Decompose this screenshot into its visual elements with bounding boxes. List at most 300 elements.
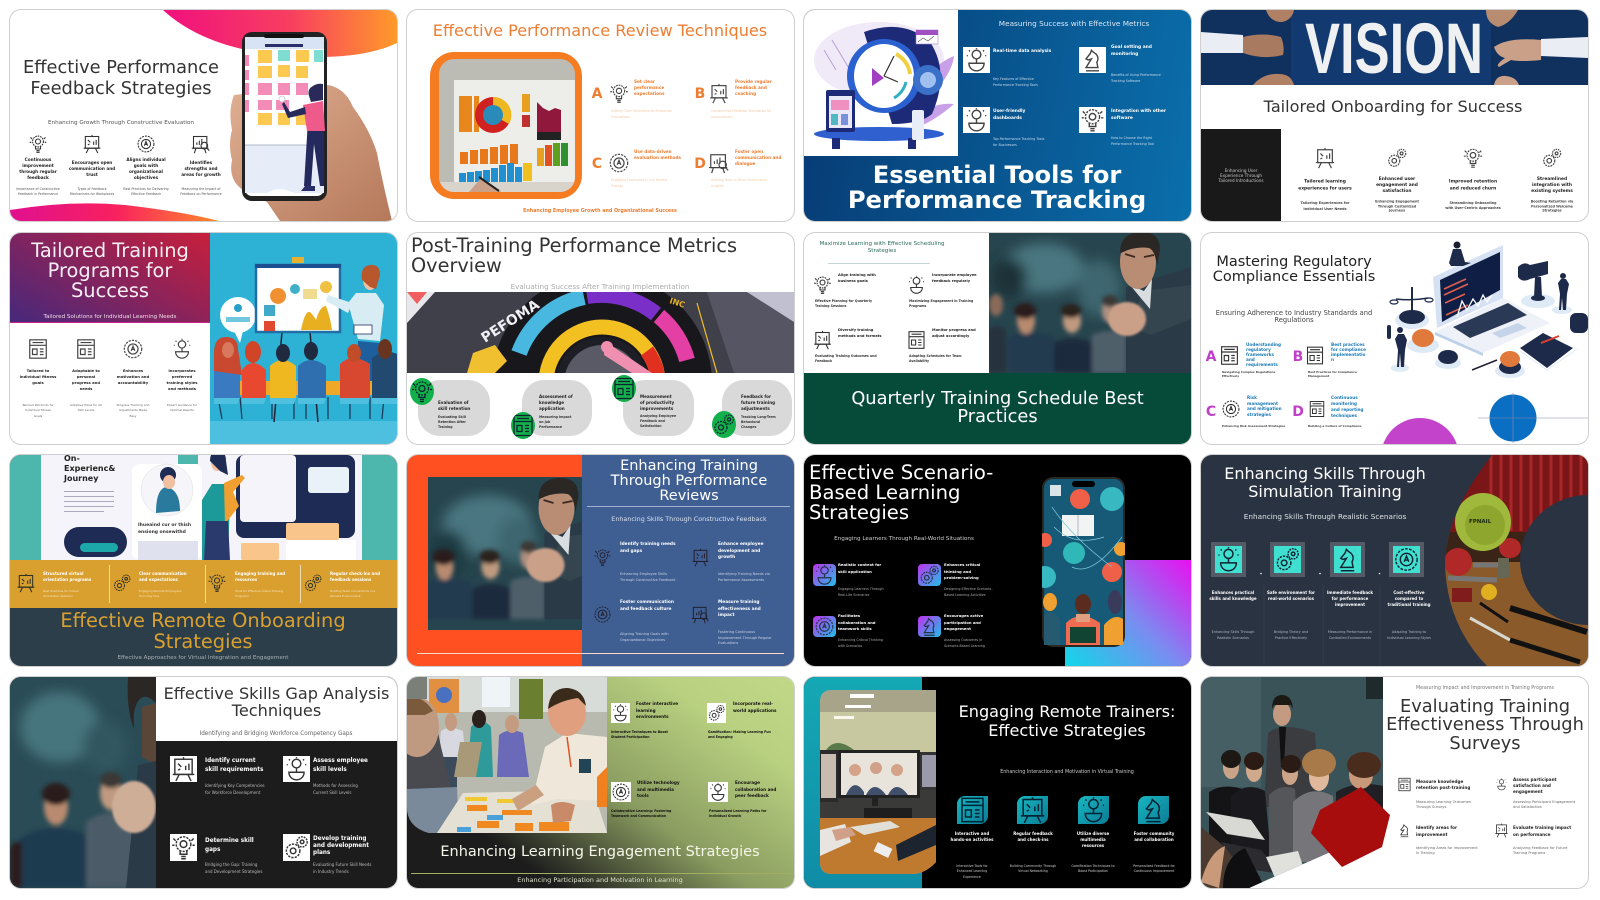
item: monitoring: [1111, 52, 1138, 56]
title: Effectiveness Through: [1386, 714, 1584, 735]
illustration: onboarding journey UI: ensiong onsewithd: [138, 529, 186, 535]
letter C: C: [592, 156, 602, 172]
note: Skill Levels: [78, 408, 94, 412]
metric label: adjustments: [741, 406, 770, 411]
metric label: future training: [741, 400, 775, 405]
icon: [1334, 546, 1361, 573]
note: Adapting Training to: [1392, 630, 1426, 634]
metric label: of productivity: [640, 400, 674, 405]
subtitle: Enhancing Skills Through Constructive Feedback: [611, 515, 767, 523]
note: and Development Strategies: [205, 869, 262, 874]
item: skill requirements: [205, 767, 263, 773]
metric note: [539, 415, 571, 430]
illustration: onboarding journey UI: Journey: [63, 474, 99, 483]
item: Facilitates: [838, 613, 860, 618]
icon: [1495, 777, 1508, 792]
note: Optimal Results: [170, 408, 194, 412]
item B: Best practices: [1331, 342, 1365, 347]
metric label: Measurement: [640, 394, 672, 399]
panel: Effective Skills Gap Analysis Techniques: [10, 677, 397, 888]
metric note: Satisfaction: [640, 424, 661, 428]
phone in hand illustration: [10, 10, 397, 221]
item: Engaging training and: [235, 571, 285, 576]
subtitle: Evaluating Success After Training Implementation: [511, 282, 689, 291]
divider: [828, 262, 930, 264]
photo: performance gauge: INC: [668, 296, 686, 310]
point: Streamlined: [1537, 177, 1567, 182]
subtitle: Enhancing Skills Through Realistic Scenarios: [1244, 512, 1406, 521]
note: [43, 589, 79, 599]
note: [611, 730, 668, 740]
item D: dialogue: [735, 161, 755, 166]
item C: evaluation methods: [634, 155, 681, 160]
note: [909, 299, 973, 310]
point: [117, 368, 149, 386]
item: development and: [718, 549, 760, 554]
note: Effective Planning for Quarterly: [815, 299, 872, 303]
point: [1376, 177, 1418, 195]
point: open communication: trust: [86, 172, 98, 177]
panel: Effective Remote Onboarding Strategies: [10, 455, 397, 666]
point: [1209, 590, 1257, 602]
icon: gear A: [593, 605, 612, 624]
point: align goals: goals with: [134, 163, 158, 168]
letter D: D: [1292, 404, 1304, 420]
note: [944, 637, 985, 649]
item: methods and formats: [838, 334, 882, 338]
note: Benefits of Using Performance: [1111, 73, 1161, 77]
note: [205, 782, 265, 796]
title: [809, 463, 993, 523]
title block: [156, 677, 397, 741]
note: Easy: [129, 414, 137, 418]
note C: Engaging Employees in the Review: [611, 178, 667, 182]
note: Based Learning Activities: [944, 593, 986, 597]
panel: Quarterly Training Schedule Best Practices: [804, 233, 1191, 444]
subtitle: Effective Approaches for Virtual Integration and Engagement: [118, 655, 288, 661]
note: Feedback in Performance: [18, 192, 58, 196]
icon: chess: [1079, 47, 1106, 73]
note: Training Programs: [1513, 851, 1545, 855]
item: [330, 571, 380, 583]
divider line: [108, 565, 111, 603]
note A: [611, 109, 672, 119]
title: Tailored Onboarding for Success: [1264, 97, 1522, 116]
note: [1300, 201, 1350, 211]
item: and development: [313, 842, 369, 848]
note: in Training: [1416, 851, 1435, 855]
letter A: A: [1206, 349, 1216, 365]
item: [735, 780, 776, 800]
item C: [634, 149, 681, 160]
title: Effective Performance: [23, 57, 219, 78]
item C: Use data-driven: [634, 149, 672, 154]
note C: Process: [611, 184, 623, 188]
item: [636, 701, 678, 721]
note: Goals: [34, 414, 42, 418]
metric label: [640, 394, 674, 412]
note: Importance of Constructive: [16, 187, 60, 191]
icon: [283, 756, 310, 782]
note: with User-Centric Approaches: [1445, 206, 1501, 210]
metric note: Behavioral: [741, 420, 760, 424]
item B: [1331, 342, 1366, 362]
item: Structured virtual: [43, 571, 83, 576]
subtitle: Tailored Solutions for Individual Learning Needs: [44, 314, 176, 320]
note: [1445, 201, 1501, 211]
item: [620, 600, 674, 613]
note: from Day One: [139, 594, 159, 598]
point: Regular feedback: [1013, 831, 1053, 836]
icon: [1215, 546, 1242, 573]
item: [235, 571, 285, 583]
note: Strategies: [1542, 208, 1562, 212]
note: Streamlining Onboarding: [1450, 201, 1496, 205]
note: Through Surveys: [1416, 805, 1446, 809]
point: continuous improvement: improvement: [22, 163, 54, 168]
side box: Enhancing User: [1225, 168, 1257, 172]
item: Utilize technology: [637, 780, 680, 785]
point: continuous improvement: through regular: [19, 169, 57, 174]
item: [620, 542, 676, 555]
item: Encourage: [735, 780, 760, 785]
metric label: Feedback for: [741, 394, 771, 399]
note: Progress Tracking and: [117, 403, 149, 407]
point: existing systems: [1531, 189, 1573, 194]
note: [1071, 864, 1115, 874]
point: experiences for users: [1298, 186, 1352, 191]
item: [733, 701, 776, 714]
photo: pointing man close-up: [10, 677, 156, 888]
gold band with dividers: [10, 560, 397, 608]
panel: Effective Performance Review Techniques: [407, 10, 794, 221]
item: Assess employee: [313, 758, 368, 764]
item: feedback regularly: [932, 279, 970, 283]
subtitle: Identifying and Bridging Workforce Competency Gaps: [200, 731, 352, 737]
item: [838, 272, 876, 284]
item: impact: [718, 613, 735, 618]
title: Reviews: [659, 488, 719, 504]
point: align goals: Aligns individual: [126, 157, 166, 162]
note: [1531, 199, 1573, 213]
item A: expectations: [634, 91, 664, 96]
point: align goals: organizational: [129, 169, 163, 174]
note: Performance Tracking Tools: [993, 83, 1038, 87]
item: gaps: [205, 846, 220, 852]
note: Improvement Through Regular: [718, 636, 772, 640]
point: [1267, 590, 1315, 602]
note: Enhancing Critical Thinking: [838, 638, 883, 642]
note: Identifying Areas for Improvement: [1416, 846, 1478, 850]
letter B: B: [1293, 349, 1303, 365]
point: [1327, 590, 1373, 608]
title: Through Performance: [611, 473, 767, 489]
title: Engaging Remote Trainers:: [959, 702, 1175, 721]
metric label: Assessment of: [539, 394, 573, 399]
point: traditional training: [1387, 602, 1431, 607]
icon: [611, 703, 630, 723]
icon: gears: [112, 573, 132, 593]
item: collaboration and: [838, 620, 876, 624]
icon: [283, 834, 310, 861]
point: Adaptable to: [72, 368, 100, 373]
note: Feedback on Performance: [180, 192, 222, 196]
note: Expert Guidance for: [167, 403, 197, 407]
point: strengths: areas for growth: [181, 172, 221, 177]
item: Goal setting and: [1111, 45, 1152, 50]
title: Surveys: [1449, 732, 1521, 754]
icon: [1017, 796, 1048, 824]
subtitle: Ensuring Adherence to Industry Standards and: [1216, 309, 1372, 317]
item: collaboration and: [735, 787, 776, 792]
note C: [611, 178, 667, 188]
note: Identifying Key Competencies: [205, 783, 265, 788]
note: Journeys: [1389, 208, 1405, 212]
item B: n: [1331, 357, 1334, 362]
point: needs: [80, 386, 92, 391]
title: [60, 610, 346, 652]
note: [993, 77, 1038, 87]
note: Types of Feedback: [77, 187, 107, 191]
note: Engaging Learners Through: [838, 587, 884, 591]
note: [1133, 864, 1175, 874]
note: Effective Feedback: [131, 192, 161, 196]
icon: easel: [710, 84, 728, 104]
point: for performance: [1332, 596, 1368, 601]
phone illustration: [1042, 477, 1125, 647]
note: Personalized Learning Paths for: [709, 808, 766, 812]
item A: and: [1246, 357, 1255, 362]
item: Clear communication: [139, 571, 187, 576]
note: Fostering Continuous: [718, 630, 755, 634]
point: Utilize diverse: [1077, 831, 1109, 836]
item: retention post-training: [1416, 785, 1470, 790]
item B: Provide regular: [735, 79, 772, 84]
item: Foster communication: [620, 600, 674, 605]
point: preferred: [172, 374, 192, 379]
item A: frameworks: [1246, 352, 1274, 357]
point: Safe environment for: [1267, 590, 1315, 595]
note: Analyzing Feedback for Future: [1513, 846, 1567, 850]
item: [205, 757, 263, 775]
item: problem-solving: [944, 575, 979, 580]
note: Top Performance Tracking Tools: [993, 137, 1044, 141]
point: strengths: Identifies: [190, 160, 212, 165]
note D: [711, 178, 768, 188]
item: [1513, 777, 1557, 795]
title: [1224, 465, 1426, 500]
note D: Building a Culture of Compliance: [1308, 424, 1362, 428]
note: Personalized Feedback for: [1133, 864, 1175, 868]
icon: [918, 616, 941, 637]
item: Assess participant: [1513, 777, 1557, 782]
item: [718, 542, 764, 562]
item D: [735, 149, 782, 166]
note: Feedback: [815, 359, 832, 363]
item: Encourages active: [944, 613, 983, 618]
divider line: [299, 565, 302, 603]
note: [1010, 864, 1056, 874]
item: Identify training needs: [620, 542, 676, 547]
item: Identify areas for: [1416, 825, 1457, 830]
panel: Effective Performance Feedback Strategies: [10, 10, 397, 221]
item: satisfaction and: [1513, 783, 1551, 788]
panel: Enhancing Skills Through Simulation Training: [1201, 455, 1588, 666]
metric card: [418, 380, 490, 436]
subtitle: Enhancing Participation and Motivation in Learning: [517, 876, 683, 884]
subtitle: Maximize Learning with Effective Scheduling: [819, 241, 945, 247]
point: [1449, 180, 1497, 192]
panel: Effective Scenario-Based Learning Strategies: [804, 455, 1191, 666]
item C: and mitigation: [1247, 406, 1282, 411]
icon: report: [75, 338, 97, 360]
panel: Enhancing Training Through Performance Reviews: [407, 455, 794, 666]
title: Effective Performance Review Techniques: [433, 21, 767, 40]
icon: [1274, 546, 1301, 573]
teal side: [804, 677, 922, 888]
note: [1111, 136, 1154, 146]
photo: pointing man: [989, 233, 1191, 373]
metric card: [623, 380, 694, 436]
letter C: C: [1206, 404, 1216, 420]
metric card: [522, 380, 592, 436]
note: [1416, 846, 1478, 856]
item C: Risk: [1247, 395, 1257, 400]
metric note: Performance: [539, 425, 562, 429]
note: [838, 586, 884, 598]
item: [1416, 825, 1457, 838]
icon: gears: [1541, 147, 1563, 169]
note D: Utilizing Data to Drive Performance: [711, 178, 767, 182]
icon: easel: [84, 134, 100, 154]
point: [1531, 177, 1573, 195]
icon: easel: [16, 573, 36, 593]
note: Real-Life Scenarios: [838, 593, 869, 597]
item: Incorporate employee: [932, 273, 977, 277]
note: [993, 137, 1044, 147]
icon: bulb gear: [1462, 147, 1484, 169]
item: [313, 757, 368, 775]
panel: Engaging Remote Trainers: Effective Strategies: [804, 677, 1191, 888]
metric note: [741, 415, 776, 430]
note: [909, 354, 962, 365]
item A: [1246, 342, 1281, 367]
item: engagement: [944, 626, 971, 631]
icon: bulb gear: [30, 136, 46, 153]
title: Compliance Essentials: [1213, 269, 1375, 285]
item B: for compliance: [1331, 347, 1366, 352]
photo: performance gauge: [407, 292, 794, 373]
item: world applications: [733, 708, 776, 713]
rule: [587, 505, 790, 508]
point: multimedia: [1080, 837, 1106, 842]
note: [1513, 846, 1567, 856]
note: [1274, 629, 1308, 641]
note: [1513, 800, 1575, 810]
item C: management: [1247, 401, 1278, 406]
note: [139, 589, 181, 599]
divider line: [204, 565, 207, 603]
note: [956, 864, 988, 880]
note: Interactive Tools for: [956, 864, 988, 868]
subtitle: Regulations: [1274, 316, 1314, 324]
note: Realistic Scenarios: [1217, 636, 1249, 640]
bottom rule: [417, 652, 784, 655]
icon: gears: [1388, 148, 1406, 167]
item: User-friendly: [993, 109, 1025, 114]
title: [31, 241, 189, 301]
title: [23, 57, 219, 99]
point: open communication: [69, 160, 115, 177]
note A: Navigating Complex Regulations: [1222, 370, 1275, 374]
footer subtitle: Enhancing Employee Growth and Organizational Success: [523, 209, 677, 214]
panel: Post-Training Performance Metrics Overview: [407, 233, 794, 444]
note B: Management: [1308, 374, 1329, 378]
icon: easel: [1316, 148, 1334, 168]
illustration: compliance isometric laptop: [1201, 233, 1588, 444]
point: and reduced churn: [1450, 186, 1496, 191]
note: [167, 403, 197, 414]
point: skills and knowledge: [1209, 596, 1257, 601]
note C: Enhancing Risk Assessment Strategies: [1222, 424, 1285, 428]
metric label: improvements: [640, 406, 673, 411]
item: [838, 562, 881, 575]
note: Tailored Workouts for: [22, 403, 54, 407]
item: participation and: [944, 620, 981, 624]
note: [620, 631, 669, 643]
item: thinking and: [944, 568, 971, 574]
icon: bulb gear: [593, 548, 612, 567]
title: Mastering Regulatory: [1216, 254, 1372, 270]
point: align goals: [126, 157, 166, 180]
title: Enhancing Training: [620, 458, 758, 474]
header block: [10, 233, 210, 323]
note: [180, 187, 222, 196]
note: Performance Assessments: [718, 578, 764, 582]
note: Controlled Environments: [1329, 636, 1371, 640]
title: Strategies: [153, 630, 253, 653]
item D: monitoring: [1331, 401, 1357, 406]
item: [139, 571, 187, 583]
note: Bridging the Gap: Training: [205, 862, 257, 867]
item D: [1331, 395, 1364, 419]
subtitle: Measuring Impact and Improvement in Training Programs: [1416, 686, 1554, 691]
note: Key Features of Effective: [993, 77, 1034, 81]
metric label: [539, 394, 573, 412]
point: Immediate feedback: [1327, 590, 1373, 595]
point: satisfaction: [1382, 189, 1412, 194]
point: individual fitness: [20, 374, 56, 379]
icon: gear A: [138, 136, 154, 152]
title band: Practices: [957, 406, 1038, 427]
letter A: A: [592, 86, 602, 102]
item B: coaching: [735, 91, 756, 96]
item: software: [1111, 116, 1133, 120]
note: [1212, 629, 1254, 641]
title: Based Learning: [809, 481, 960, 504]
photo: VISION with hands: [1201, 10, 1588, 85]
icon: certificate: [1308, 398, 1326, 420]
item: engagement: [1513, 789, 1543, 794]
note: in Industry Trends: [313, 869, 349, 874]
icon: chart easel: [192, 136, 210, 154]
icon: [611, 782, 631, 802]
icon: easel: [812, 330, 833, 350]
icon: chart easel: [691, 605, 710, 624]
item: and gaps: [620, 549, 642, 554]
item: effectiveness and: [718, 607, 761, 612]
point: continuous improvement: Continuous: [25, 157, 51, 162]
